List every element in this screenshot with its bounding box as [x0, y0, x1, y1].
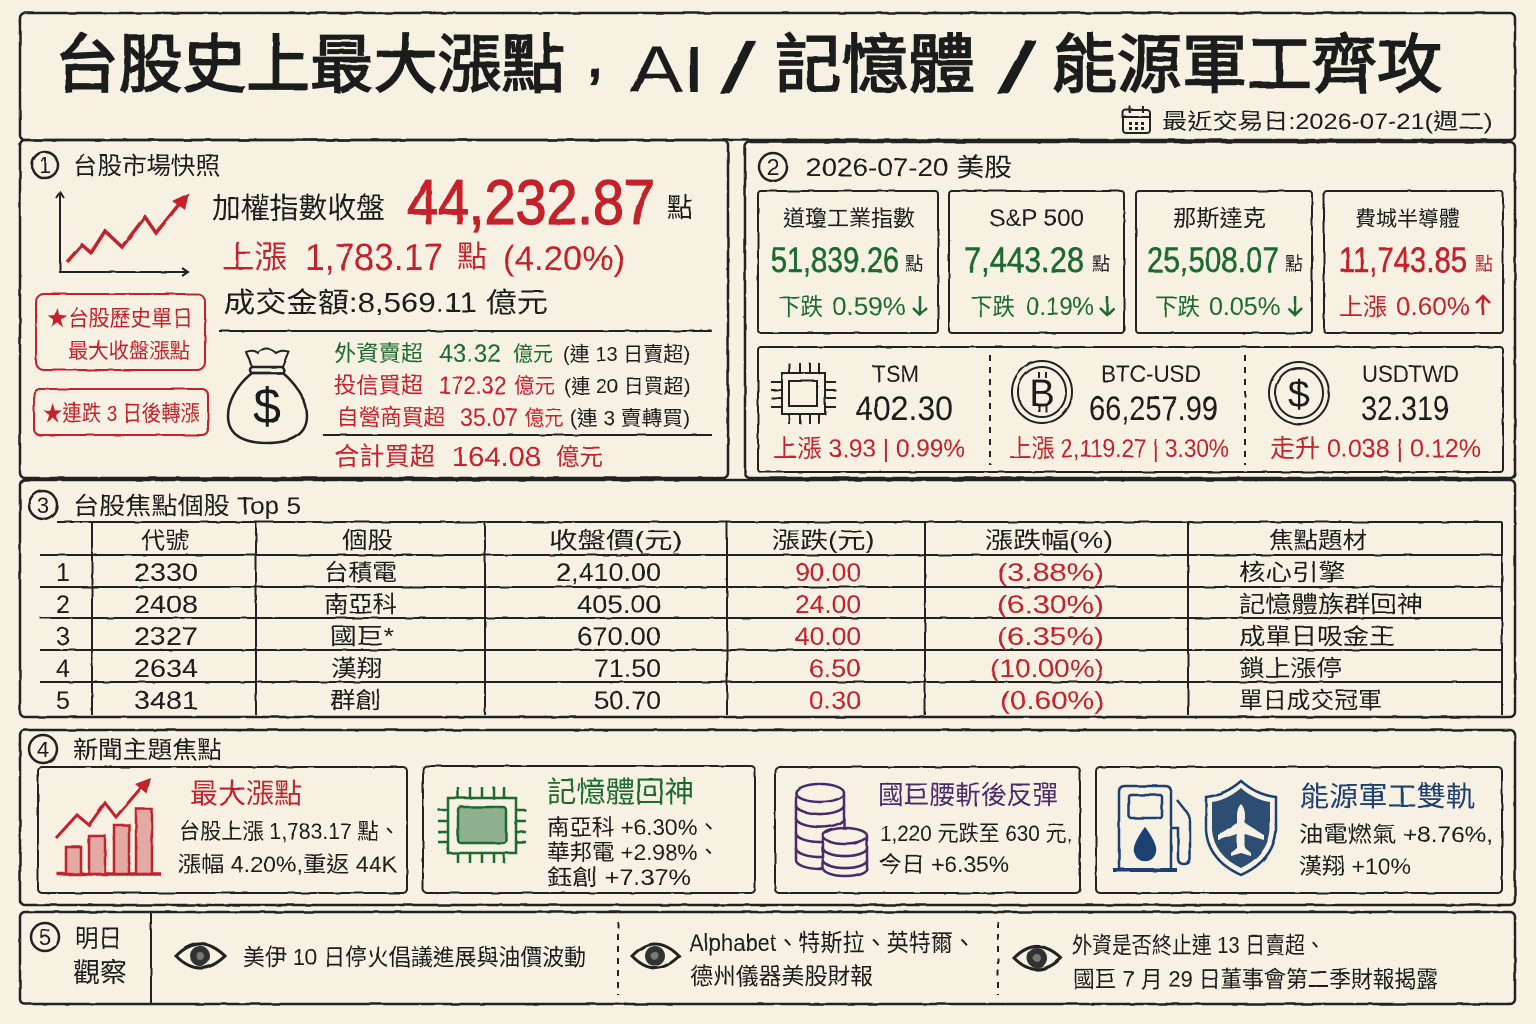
institutional flows: 自營商買超 — [337, 405, 445, 430]
panel 4 heading: 4 — [37, 737, 49, 762]
BTC quote: 上漲 2,119.27 | 3.30% — [1009, 435, 1229, 463]
row 2: (6.30%) — [997, 591, 1104, 619]
card: Yageo rebound: 今日 +6.35% — [879, 852, 1009, 877]
icon: money bag — [228, 348, 307, 443]
card: S&P 500: 0.19% — [1026, 293, 1094, 321]
panel 5 heading: 觀察 — [73, 958, 127, 988]
card: Dow Jones: 下跌 — [778, 294, 823, 321]
card: Dow Jones: 道瓊工業指數 — [783, 206, 915, 231]
card: biggest gain — [38, 767, 407, 893]
institutional flows: 億元 — [513, 343, 553, 366]
TSM quote — [773, 361, 965, 463]
panel 2 heading: 2026-07-20 美股 — [806, 154, 1012, 182]
card: SOX: 點 — [1475, 253, 1493, 275]
card: memory rebound — [423, 766, 755, 893]
TSM quote: 上漲 3.93 | 0.99% — [773, 435, 965, 463]
index change: 1,783.17 — [305, 237, 443, 279]
row 4: 71.50 — [594, 655, 661, 683]
row 4: 4 — [56, 655, 70, 683]
watch item 2 — [632, 930, 975, 989]
icon: green chip — [438, 787, 526, 863]
row 4 — [56, 655, 1342, 683]
total net buy: 億元 — [556, 444, 603, 471]
row 4: 鎖上漲停 — [1239, 655, 1342, 681]
institutional flows: (連 13 日賣超) — [563, 343, 690, 366]
icon: eye — [176, 944, 225, 968]
card: SOX — [1324, 191, 1503, 333]
row 5: 單日成交冠軍 — [1239, 687, 1382, 713]
stock table — [40, 522, 1502, 715]
row 4: 2634 — [134, 655, 198, 683]
card: energy and defense: 漢翔 +10% — [1299, 854, 1411, 879]
card: memory rebound: 鈺創 +7.37% — [547, 865, 691, 890]
index close: 加權指數收盤 — [212, 192, 385, 225]
institutional flows: 172.32 — [439, 372, 506, 400]
institutional flows: 億元 — [514, 375, 555, 398]
callout: reversal — [34, 389, 208, 435]
row 3: 國巨* — [330, 623, 394, 649]
institutional flows — [334, 340, 690, 432]
row 3: (6.35%) — [997, 623, 1104, 651]
row 2: 24.00 — [795, 591, 861, 619]
row 1: 台積電 — [324, 559, 397, 585]
index change — [222, 237, 625, 279]
title: 能源軍工齊攻 — [1052, 29, 1442, 101]
row 5: 群創 — [330, 687, 381, 713]
card: Nasdaq: 那斯達克 — [1173, 205, 1266, 231]
institutional flows: 43.32 — [439, 340, 501, 368]
latest trading date: 最近交易日:2026-07-21(週二) — [1162, 109, 1492, 134]
card: Dow Jones: 點 — [905, 253, 923, 275]
card: Yageo rebound: 1,220 元跌至 630 元, — [880, 821, 1072, 846]
TSM quote: 402.30 — [855, 390, 953, 428]
USDTWD quote — [1270, 361, 1481, 463]
panel 1 heading: 台股市場快照 — [73, 153, 220, 180]
USDTWD quote: 走升 0.038 | 0.12% — [1270, 435, 1481, 463]
index close: 44,232.87 — [407, 168, 655, 238]
row 1: (3.88%) — [997, 559, 1104, 587]
row 1 — [56, 559, 1345, 587]
row 5 — [56, 687, 1382, 715]
panel 3: top 5 stocks — [20, 480, 1515, 717]
card: S&P 500: 下跌 — [970, 294, 1015, 321]
card: S&P 500: 點 — [1092, 253, 1110, 275]
panel 4: news themes — [20, 730, 1515, 905]
panel 5 heading: 5 — [39, 925, 51, 950]
watch item 3: 國巨 7 月 29 日董事會第二季財報揭露 — [1073, 966, 1438, 992]
panel 4 heading: 新聞主題焦點 — [73, 737, 222, 764]
BTC quote: 66,257.99 — [1089, 390, 1218, 428]
panel 3 heading: 3 — [37, 493, 49, 518]
row 3: 成單日吸金王 — [1239, 623, 1395, 649]
row 1: 90.00 — [795, 559, 861, 587]
panel 5 heading — [31, 923, 127, 988]
card: SOX: 上漲 — [1339, 294, 1387, 321]
watch item 2: Alphabet、特斯拉、英特爾、 — [689, 930, 975, 957]
row 5: 0.30 — [809, 687, 861, 715]
total net buy: 合計買超 — [334, 443, 435, 471]
panel 1 heading: 1 — [39, 153, 51, 178]
icon: bitcoin — [1012, 361, 1072, 423]
row 3: 40.00 — [795, 623, 861, 651]
callout: record gain: ★台股歷史單日 — [47, 306, 193, 331]
card: Nasdaq: 25,508.07 — [1147, 241, 1279, 280]
card: SOX: 費城半導體 — [1355, 208, 1460, 231]
watch item 3 — [1014, 932, 1438, 992]
USDTWD quote: 32.319 — [1361, 390, 1449, 428]
card: S&P 500: S&P 500 — [989, 205, 1084, 232]
index change: 上漲 — [222, 239, 287, 275]
icon: chip — [771, 363, 836, 424]
icon: bitcoin: B — [1029, 373, 1055, 415]
card: Nasdaq: 點 — [1285, 253, 1303, 275]
table header: 漲跌(元) — [772, 527, 875, 553]
row 3: 2327 — [134, 623, 198, 651]
institutional flows: 億元 — [525, 407, 563, 430]
row 3: 3 — [56, 623, 70, 651]
row 2: 南亞科 — [324, 591, 397, 617]
title: AI — [630, 32, 705, 106]
callout: record gain: 最大收盤漲點 — [68, 340, 190, 363]
card: S&P 500: 7,443.28 — [964, 241, 1084, 280]
row 3 — [56, 623, 1395, 651]
title: , — [586, 18, 604, 90]
TSM quote: TSM — [872, 361, 919, 388]
title panel — [20, 13, 1515, 140]
card: Nasdaq: 下跌 — [1155, 294, 1200, 321]
institutional flows: (連 20 日買超) — [564, 375, 690, 398]
row 4: (10.00%) — [990, 655, 1104, 683]
table header: 收盤價(元) — [549, 527, 682, 553]
card: energy and defense: 油電燃氣 +8.76%, — [1299, 822, 1493, 847]
row 5: (0.60%) — [1000, 687, 1104, 715]
panel 1: Taiwan market snapshot — [20, 140, 728, 478]
card: Dow Jones: 0.59% — [832, 293, 906, 321]
card: memory rebound: 華邦電 +2.98%、 — [547, 840, 720, 865]
turnover: 成交金額:8,569.11 億元 — [224, 287, 548, 318]
card: Dow Jones: 51,839.26 — [771, 241, 899, 280]
watch item 3: 外資是否終止連 13 日賣超、 — [1072, 932, 1325, 958]
icon: dollar coin — [1269, 362, 1329, 424]
BTC quote: BTC-USD — [1101, 361, 1201, 388]
card: memory rebound: 南亞科 +6.30%、 — [547, 815, 720, 840]
index change: (4.20%) — [503, 240, 625, 278]
title: 記憶體 — [775, 29, 975, 101]
card: biggest gain: 台股上漲 1,783.17 點、 — [179, 819, 400, 844]
USDTWD quote: USDTWD — [1362, 361, 1459, 388]
card: biggest gain: 漲幅 4.20%,重返 44K — [178, 852, 397, 877]
row 2 — [56, 591, 1423, 619]
icon: rising line chart — [56, 192, 189, 276]
card: Nasdaq — [1136, 191, 1312, 333]
index close — [212, 168, 693, 238]
index close: 點 — [667, 193, 693, 223]
callout: record gain — [36, 294, 205, 370]
panel 5 heading: 明日 — [75, 925, 122, 953]
card: Nasdaq: 0.05% — [1209, 293, 1280, 321]
panel 3 heading: 台股焦點個股 Top 5 — [73, 493, 301, 520]
panel 4 heading — [29, 735, 222, 764]
watch item 2: 德州儀器美股財報 — [690, 963, 873, 989]
title — [55, 18, 1442, 109]
panel 2: US market — [745, 142, 1515, 478]
card: biggest gain: 最大漲點 — [190, 778, 302, 809]
table header: 焦點題材 — [1269, 527, 1367, 553]
row 1: 2330 — [134, 559, 198, 587]
row 2: 記憶體族群回神 — [1239, 591, 1423, 617]
watch item 1: 美伊 10 日停火倡議進展與油價波動 — [243, 944, 586, 970]
card: energy and defense: 能源軍工雙軌 — [1300, 781, 1475, 812]
institutional flows: 35.07 — [460, 404, 518, 432]
BTC quote — [1009, 361, 1229, 463]
card: S&P 500 — [949, 191, 1124, 333]
row 4: 漢翔 — [331, 655, 382, 681]
icon: eye — [1014, 946, 1061, 970]
card: energy and defense — [1096, 767, 1502, 893]
table header: 代號 — [141, 527, 189, 553]
row 5: 50.70 — [594, 687, 661, 715]
assets row — [758, 347, 1503, 472]
icon: money bag: $ — [253, 378, 281, 434]
title: / — [720, 29, 756, 109]
row 1: 1 — [56, 559, 70, 587]
panel 2 heading: 2 — [767, 154, 779, 180]
icon: dollar coin: $ — [1288, 374, 1310, 416]
row 2: 405.00 — [577, 591, 661, 619]
card: memory rebound: 記憶體回神 — [547, 776, 694, 809]
icon: bars and arrow — [56, 778, 161, 874]
row 2: 2408 — [134, 591, 198, 619]
panel 5: tomorrow watch — [20, 912, 1515, 1004]
card: Yageo rebound — [775, 767, 1080, 893]
row 1: 2,410.00 — [556, 559, 661, 587]
title: 台股史上最大漲點 — [55, 29, 565, 101]
icon: coin stacks — [796, 784, 867, 876]
card: SOX: 0.60% — [1396, 293, 1470, 321]
icon: calendar — [1123, 106, 1150, 133]
icon: fuel pump — [1113, 786, 1190, 870]
institutional flows: (連 3 賣轉買) — [570, 407, 690, 430]
institutional flows: 外資賣超 — [334, 341, 423, 366]
card: SOX: 11,743.85 — [1339, 241, 1467, 280]
row 4: 6.50 — [809, 655, 861, 683]
card: Dow Jones — [758, 191, 938, 333]
table header — [141, 527, 1367, 553]
row 5: 5 — [56, 687, 70, 715]
institutional flows: 投信買超 — [334, 373, 423, 398]
card: Yageo rebound: 國巨腰斬後反彈 — [878, 780, 1058, 810]
index change: 點 — [457, 241, 487, 274]
row 5: 3481 — [134, 687, 198, 715]
table header: 漲跌幅(%) — [985, 527, 1113, 553]
icon: shield and plane — [1206, 781, 1276, 875]
row 2: 2 — [56, 591, 70, 619]
row 3: 670.00 — [577, 623, 661, 651]
total net buy — [334, 441, 603, 472]
callout: reversal: ★連跌 3 日後轉漲 — [43, 401, 200, 426]
total net buy: 164.08 — [452, 441, 541, 472]
title: / — [997, 29, 1037, 109]
icon: eye — [632, 944, 679, 968]
row 1: 核心引擎 — [1239, 559, 1345, 585]
table header: 個股 — [342, 527, 393, 553]
